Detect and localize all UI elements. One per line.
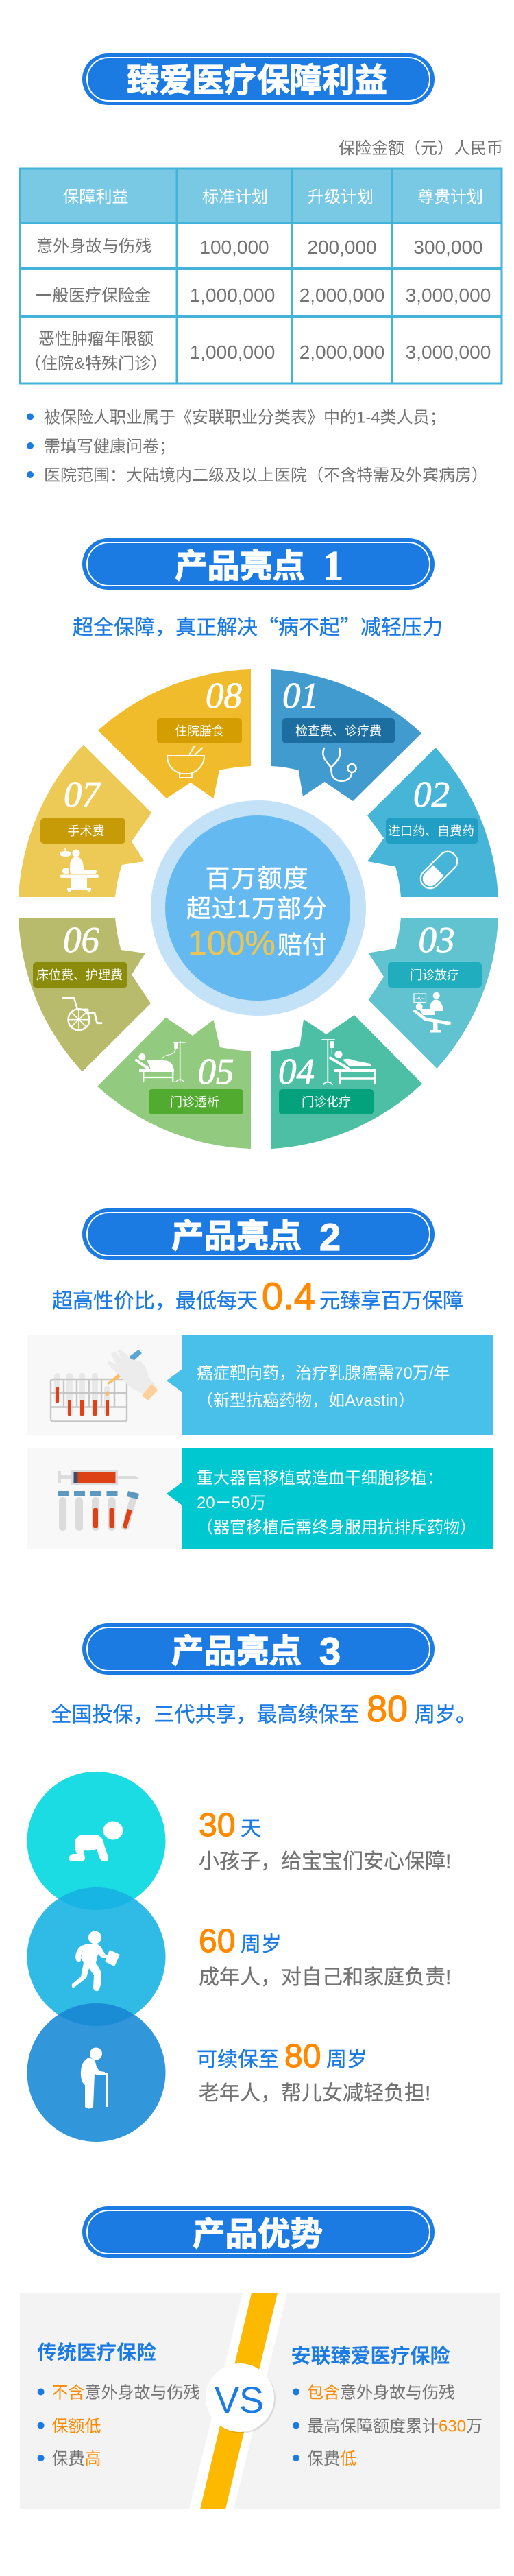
row: accident: 意外身故与伤残 <box>36 237 151 256</box>
heading: 产品优势 <box>82 2206 435 2258</box>
icon: elder with cane <box>81 2048 108 2108</box>
card 1 text: 癌症靶向药，治疗乳腺癌需70万/年 <box>197 1364 450 1383</box>
Allianz insurance column: 保费低 <box>307 2450 356 2468</box>
table header row <box>63 188 483 206</box>
eligibility bullet list: 需填写健康问卷； <box>44 438 175 456</box>
age circles <box>27 1772 451 2142</box>
segment 06 <box>19 918 151 1071</box>
row: malignant tumor: 恶性肿瘤年限额 <box>38 330 154 348</box>
text: 60 years <box>199 1923 451 1989</box>
text: 30 days <box>199 1807 451 1873</box>
segment 06: 床位费、护理费 <box>36 968 123 982</box>
icon: test tube rack and gloved hand <box>51 1350 158 1421</box>
row: accident <box>36 237 483 258</box>
traditional insurance column: 保额低 <box>52 2417 101 2436</box>
subtitle: nationwide, three generations: 全国投保，三代共享，最高续保至 <box>51 1704 359 1726</box>
traditional insurance column: 保费高 <box>52 2450 101 2468</box>
diagonal divider <box>189 2293 287 2509</box>
segment 07 <box>19 745 151 897</box>
Allianz insurance column: 包含意外身故与伤残 <box>307 2384 455 2402</box>
table header row: 升级计划 <box>308 188 374 206</box>
title: 臻爱医疗保障利益 <box>82 53 435 105</box>
comparison panel <box>20 2293 500 2509</box>
Allianz insurance column <box>291 2345 482 2468</box>
centre circle: 100% <box>188 924 276 962</box>
text: 60 years: 周岁 <box>241 1933 282 1956</box>
segment 01: 01 <box>282 676 319 716</box>
VS badge: VS <box>215 2380 264 2421</box>
wheel diagram <box>19 669 498 1149</box>
segment 01 <box>271 669 421 801</box>
row: malignant tumor <box>25 330 491 373</box>
centre circle: 赔付 <box>278 931 327 959</box>
subtitle: value for money: 超高性价比，最低每天 <box>52 1290 258 1313</box>
row: general medical <box>36 285 491 306</box>
text: renew to 80: 可续保至 <box>197 2049 279 2071</box>
text: renew to 80: 老年人，帮儿女减轻负担! <box>199 2082 430 2105</box>
row: general medical: 2,000,000 <box>299 285 384 306</box>
callout arrow <box>167 1482 182 1505</box>
segment 04: 04 <box>278 1052 315 1092</box>
icon: walking adult <box>72 1931 120 1991</box>
table header row: 保障利益 <box>63 188 129 206</box>
heading: 产品亮点 1: 1 <box>323 543 343 588</box>
subtitle: nationwide, three generations: 80 <box>367 1689 408 1730</box>
segment 04 <box>271 1015 422 1149</box>
text: renew to 80: 周岁 <box>326 2049 367 2071</box>
segment 02 <box>367 748 498 897</box>
icon: syringe and blood tubes <box>58 1470 139 1531</box>
card: targeted drugs <box>27 1335 493 1435</box>
row: malignant tumor: 2,000,000 <box>299 342 384 363</box>
segment 04: 门诊化疗 <box>302 1095 351 1109</box>
heading: 产品亮点 3 <box>82 1623 435 1675</box>
Allianz insurance column: 最高保障额度累计630万 <box>307 2417 482 2436</box>
centre circle: 超过1万部分 <box>186 894 328 922</box>
row: accident: 100,000 <box>199 237 269 258</box>
traditional insurance column: 不含意外身故与伤残 <box>52 2384 200 2402</box>
subtitle: value for money <box>52 1274 463 1317</box>
Allianz insurance column: 安联臻爱医疗保险 <box>291 2345 450 2368</box>
traditional insurance column <box>37 2341 200 2468</box>
card 2 text: （器官移植后需终身服用抗排斥药物） <box>197 1518 476 1537</box>
text: 60 years: 60 <box>199 1923 235 1959</box>
card 1 text: （新型抗癌药物，如Avastin） <box>197 1392 415 1410</box>
title: 臻爱医疗保障利益: 臻爱医疗保障利益 <box>127 63 387 99</box>
segment 05: 门诊透析 <box>170 1095 219 1109</box>
segment 05: 05 <box>197 1052 234 1092</box>
eligibility bullet list: 被保险人职业属于《安联职业分类表》中的1-4类人员； <box>44 409 446 427</box>
segment 02: 02 <box>413 775 450 815</box>
currency note: 保险金额（元）人民币 <box>339 139 503 158</box>
centre circle: 百万额度 <box>205 864 310 892</box>
row: general medical: 一般医疗保险金 <box>36 287 151 305</box>
text: 60 years: 成年人，对自己和家庭负责! <box>199 1966 451 1989</box>
segment 08: 住院膳食 <box>175 724 224 738</box>
segment 01: 检查费、诊疗费 <box>295 724 382 738</box>
card 2 text <box>197 1469 476 1537</box>
heading: 产品亮点 1 <box>82 538 435 590</box>
heading: 产品亮点 3: 3 <box>319 1630 341 1673</box>
table header row: 标准计划 <box>202 188 268 206</box>
row: malignant tumor: 3,000,000 <box>406 342 491 363</box>
text: renew to 80 <box>197 2038 430 2105</box>
segment 05 <box>97 1018 251 1149</box>
benefits table <box>19 169 502 383</box>
subtitle: comprehensive protection: 超全保障，真正解决“病不起”减轻压力 <box>73 610 443 641</box>
row: general medical: 3,000,000 <box>406 285 491 306</box>
VS badge <box>206 2363 276 2433</box>
heading: 产品优势: 产品优势 <box>193 2217 323 2253</box>
subtitle: value for money: 元臻享百万保障 <box>319 1290 463 1313</box>
icon: crawling baby <box>69 1822 123 1861</box>
segment 08 <box>98 669 251 798</box>
card: organ transplant <box>27 1448 493 1549</box>
row: malignant tumor: （住院&特殊门诊） <box>25 355 167 373</box>
segment 03: 门诊放疗 <box>410 968 459 982</box>
eligibility bullet list: 医院范围：大陆境内二级及以上医院（不含特需及外宾病房） <box>44 466 488 485</box>
segment 02: 进口药、自费药 <box>388 824 474 838</box>
heading: 产品亮点 3: 产品亮点 <box>171 1634 302 1670</box>
card 2 text: 重大器官移植或造血干细胞移植： <box>197 1469 443 1488</box>
text: renew to 80: 80 <box>284 2038 321 2075</box>
row: accident: 200,000 <box>307 237 377 258</box>
heading: 产品亮点 2: 产品亮点 <box>171 1219 302 1255</box>
row: malignant tumor: 1,000,000 <box>190 342 275 363</box>
segment 03: 03 <box>418 920 455 960</box>
card 2 text: 20－50万 <box>197 1494 266 1512</box>
segment 07: 手术费 <box>67 824 104 838</box>
row: general medical: 1,000,000 <box>190 285 275 306</box>
traditional insurance column: 传统医疗保险 <box>37 2341 156 2364</box>
callout arrow <box>167 1369 182 1392</box>
heading: 产品亮点 2: 2 <box>319 1215 341 1259</box>
row: accident: 300,000 <box>413 237 483 258</box>
centre circle <box>151 800 366 1016</box>
segment 08: 08 <box>206 676 242 716</box>
segment 07: 07 <box>64 775 101 815</box>
segment 06: 06 <box>63 920 100 960</box>
subtitle: value for money: 0.4 <box>262 1274 315 1317</box>
text: 30 days: 天 <box>241 1817 261 1840</box>
text: 30 days: 30 <box>199 1807 235 1844</box>
eligibility bullet list <box>27 409 488 485</box>
subtitle: nationwide, three generations: 周岁。 <box>415 1704 476 1726</box>
subtitle: nationwide, three generations <box>51 1689 476 1730</box>
card 1 text <box>197 1364 450 1410</box>
segment 03 <box>369 918 498 1069</box>
heading: 产品亮点 2 <box>82 1208 435 1260</box>
text: 30 days: 小孩子，给宝宝们安心保障! <box>199 1850 451 1873</box>
table header row: 尊贵计划 <box>417 188 483 206</box>
heading: 产品亮点 1: 产品亮点 <box>175 549 305 585</box>
